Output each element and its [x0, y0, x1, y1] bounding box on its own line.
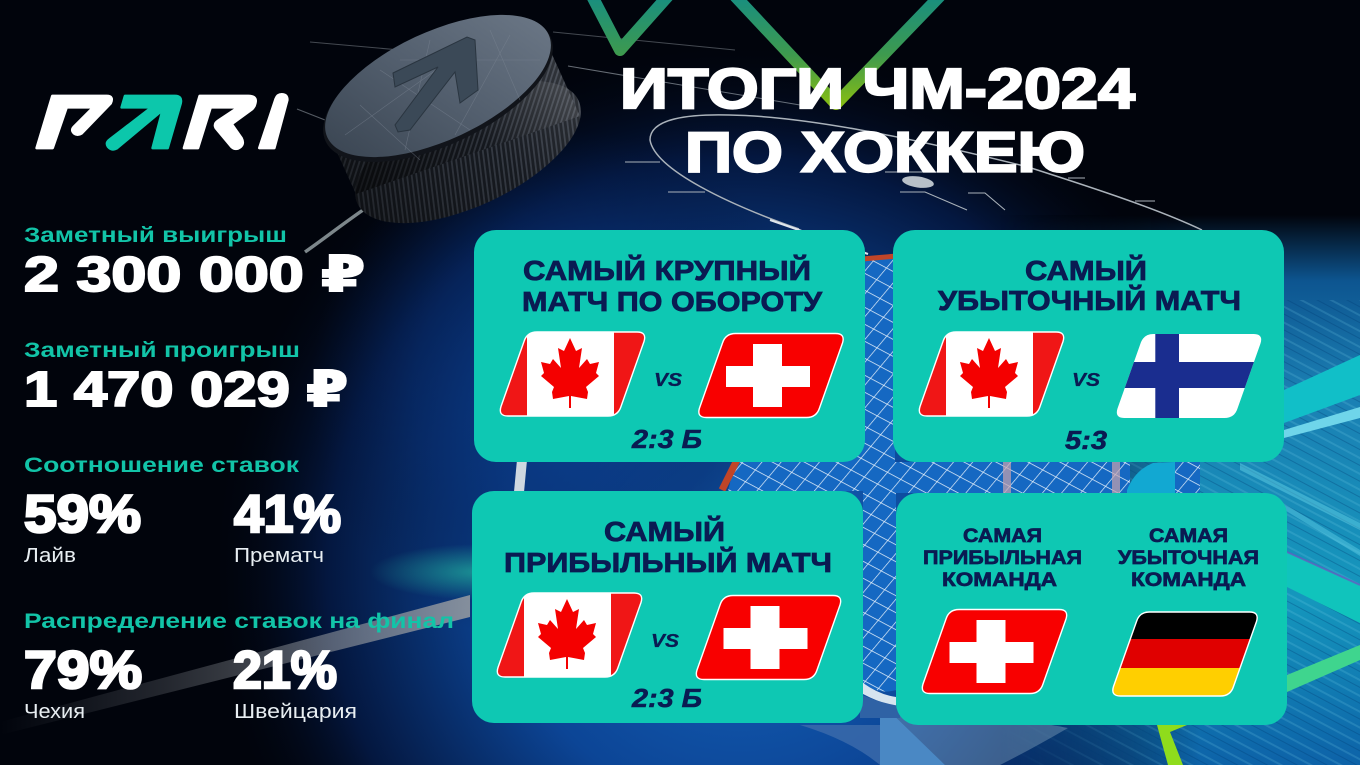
flag: Germany [1110, 612, 1260, 696]
stat: bet ratio: Прематч [234, 545, 324, 567]
heading [938, 254, 1241, 316]
stat: notable win: 2 300 000 ₽ [24, 248, 365, 302]
most profitable team label: ПРИБЫЛЬНАЯ [923, 547, 1082, 569]
title: ПО ХОККЕЮ [685, 120, 1085, 184]
vs label: VS [651, 631, 679, 651]
stat: bet ratio: 59% [24, 485, 141, 544]
stat: final bet distribution: Швейцария [234, 701, 357, 723]
panel: most profitable match [472, 491, 863, 723]
rink markings [297, 32, 1202, 252]
stat: bet ratio: Соотношение ставок [24, 453, 299, 477]
panel: best and worst teams [896, 493, 1287, 725]
most unprofitable team label: УБЫТОЧНАЯ [1118, 547, 1259, 569]
logo: PARI [37, 94, 287, 149]
flag: Finland [1114, 334, 1264, 418]
flag: Switzerland [922, 610, 1067, 694]
stat: final bet distribution: 79% [24, 641, 142, 700]
heading: ПРИБЫЛЬНЫЙ МАТЧ [504, 546, 832, 578]
most unprofitable team label: САМАЯ [1149, 525, 1228, 547]
heading [522, 254, 823, 317]
stat: notable loss [24, 338, 348, 417]
most unprofitable team label [1118, 525, 1259, 591]
stat: bet ratio [24, 453, 341, 567]
most profitable team label: КОМАНДА [942, 569, 1057, 591]
stat: notable loss: Заметный проигрыш [24, 338, 300, 362]
stat: final bet distribution: 21% [233, 641, 337, 700]
stat: notable win: Заметный выигрыш [24, 223, 287, 247]
score: 2:3 Б [631, 424, 702, 454]
vs label: VS [654, 370, 682, 390]
stat: final bet distribution: Чехия [24, 701, 85, 723]
stat: notable loss: 1 470 029 ₽ [24, 363, 348, 417]
stat: notable win [24, 223, 365, 302]
hockey goal net [519, 220, 1200, 718]
score: 5:3 [1065, 425, 1108, 455]
flag: Canada [498, 332, 648, 416]
vs label: VS [1072, 370, 1100, 390]
most profitable team label [923, 525, 1082, 591]
panel: most unprofitable match [893, 230, 1284, 462]
title [620, 57, 1135, 184]
heading: САМЫЙ [1025, 254, 1147, 286]
green ribbon zigzag [592, 0, 940, 104]
heading: УБЫТОЧНЫЙ МАТЧ [938, 284, 1241, 316]
stat: final bet distribution: Распределение ставок на финал [24, 609, 454, 633]
heading: САМЫЙ КРУПНЫЙ [523, 254, 811, 286]
stat: bet ratio: Лайв [24, 545, 76, 567]
panel: biggest turnover match [474, 230, 865, 462]
hockey puck [302, 0, 601, 253]
heading: САМЫЙ [604, 515, 725, 547]
flag: Canada [917, 332, 1067, 416]
flag: Switzerland [696, 596, 841, 680]
left stats column [24, 223, 454, 723]
most unprofitable team label: КОМАНДА [1131, 569, 1246, 591]
heading: МАТЧ ПО ОБОРОТУ [522, 286, 823, 317]
score: 2:3 Б [631, 683, 702, 713]
flag: Switzerland [699, 334, 843, 418]
most profitable team label: САМАЯ [963, 525, 1042, 547]
stat: bet ratio: 41% [234, 485, 341, 544]
stat: final bet distribution [24, 609, 454, 723]
flag: Canada [495, 593, 645, 677]
title: ИТОГИ ЧМ-2024 [620, 57, 1135, 121]
heading [504, 515, 832, 578]
